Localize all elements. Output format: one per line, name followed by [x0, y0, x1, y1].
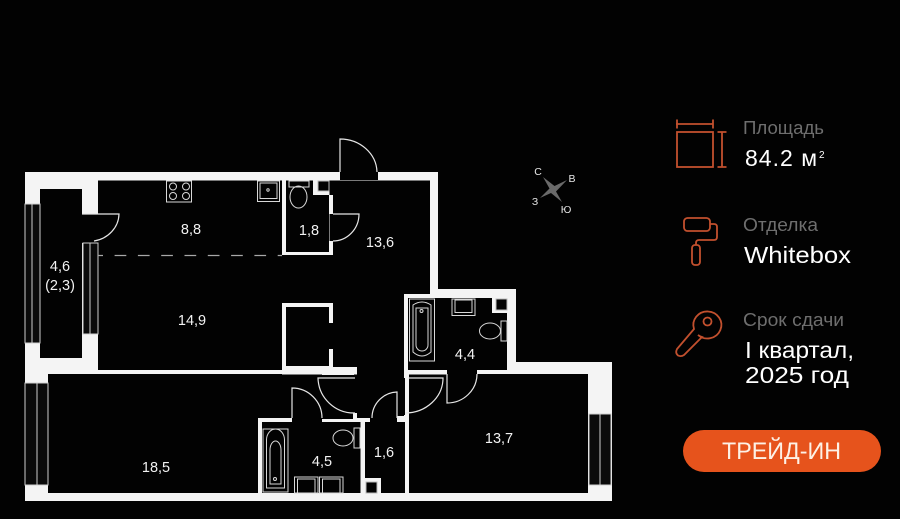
room interiors	[40, 180, 588, 493]
delivery date block	[743, 310, 854, 388]
wall between living room and bedroom	[98, 370, 282, 374]
area block: 2	[819, 150, 825, 161]
compass: Ю	[561, 204, 572, 216]
icon: shaft 1.6	[365, 478, 381, 493]
delivery date block: I квартал,	[745, 337, 854, 363]
compass: С	[534, 166, 542, 178]
compass: В	[568, 173, 576, 185]
room areas: 1,8	[299, 223, 319, 239]
delivery date block: Срок сдачи	[743, 310, 844, 330]
bedroom 18.5	[48, 374, 322, 493]
room areas: 4,4	[455, 347, 475, 363]
icon: paint roller	[684, 218, 717, 265]
icon: bathtub 4.5	[263, 429, 288, 492]
hall corridor	[282, 255, 404, 303]
kitchen and living room with hall	[98, 180, 430, 418]
room areas: 14,9	[178, 313, 206, 329]
delivery date block: 2025 год	[745, 362, 850, 388]
icon: shaft 4.4	[492, 298, 507, 313]
bathroom 4.4	[408, 298, 507, 370]
toilet 1.8	[286, 180, 329, 252]
icon: toilet 1.8	[289, 181, 309, 208]
room areas: (2,3)	[45, 278, 75, 294]
room areas: 4,6	[50, 259, 70, 275]
room areas: 13,6	[366, 235, 394, 251]
wall above bedroom 13.7	[477, 370, 507, 374]
closet niche	[286, 307, 333, 366]
doors	[82, 139, 477, 418]
wall of bathroom 4.5	[258, 418, 292, 493]
door swing area of bathroom 4.5	[292, 375, 354, 419]
icon: toilet 4.5	[333, 428, 360, 448]
bathroom door gap	[292, 416, 322, 423]
icon: toilet 4.4	[480, 321, 507, 341]
closet wall frame	[282, 303, 357, 374]
wall of room 1.6	[397, 378, 409, 493]
balcony	[40, 189, 82, 358]
trade-in button: ТРЕЙД-ИН	[722, 437, 841, 465]
bathroom door opening	[447, 370, 477, 376]
room 1.6	[365, 422, 405, 493]
area block: Площадь	[743, 118, 824, 138]
wall top of bathroom 4.5 right	[322, 413, 370, 493]
icon: kitchen sink	[258, 181, 280, 202]
room areas: 1,6	[374, 445, 394, 461]
left window	[25, 204, 40, 343]
finish block	[743, 215, 852, 268]
kitchen zone dashed line	[98, 254, 282, 256]
room areas: 4,5	[312, 454, 332, 470]
icon: sink 4.4	[452, 299, 475, 316]
outer walls	[25, 172, 612, 501]
compass: З	[532, 196, 538, 208]
room areas	[45, 222, 513, 476]
bedroom 18.5 window	[25, 383, 48, 485]
room 13.7	[409, 374, 588, 493]
room areas: 8,8	[181, 222, 201, 238]
floor plan	[25, 139, 612, 501]
balcony door opening	[82, 214, 99, 243]
room 1.6 door gap	[370, 412, 397, 423]
bedroom 13.7 window	[589, 414, 611, 485]
room areas: 18,5	[142, 460, 170, 476]
balcony window	[83, 243, 98, 334]
icon: double sink 4.5	[294, 477, 343, 493]
wall above bathroom 4.4	[404, 294, 434, 298]
wall below bathroom 4.4	[404, 294, 447, 378]
area block: 84.2 м	[745, 145, 817, 171]
icon: key	[676, 311, 721, 356]
lower corridor	[354, 300, 404, 418]
finish block: Отделка	[743, 215, 819, 235]
icon: bathtub 4.4	[410, 299, 434, 361]
icon: area	[676, 120, 726, 167]
bathroom 4.5	[262, 422, 360, 493]
trade-in button	[683, 430, 881, 472]
icon: shaft 1.8	[314, 180, 330, 195]
icon: cooktop	[166, 181, 192, 202]
finish block: Whitebox	[744, 242, 852, 268]
area block	[743, 118, 825, 171]
compass	[532, 166, 576, 216]
room areas: 13,7	[485, 431, 513, 447]
